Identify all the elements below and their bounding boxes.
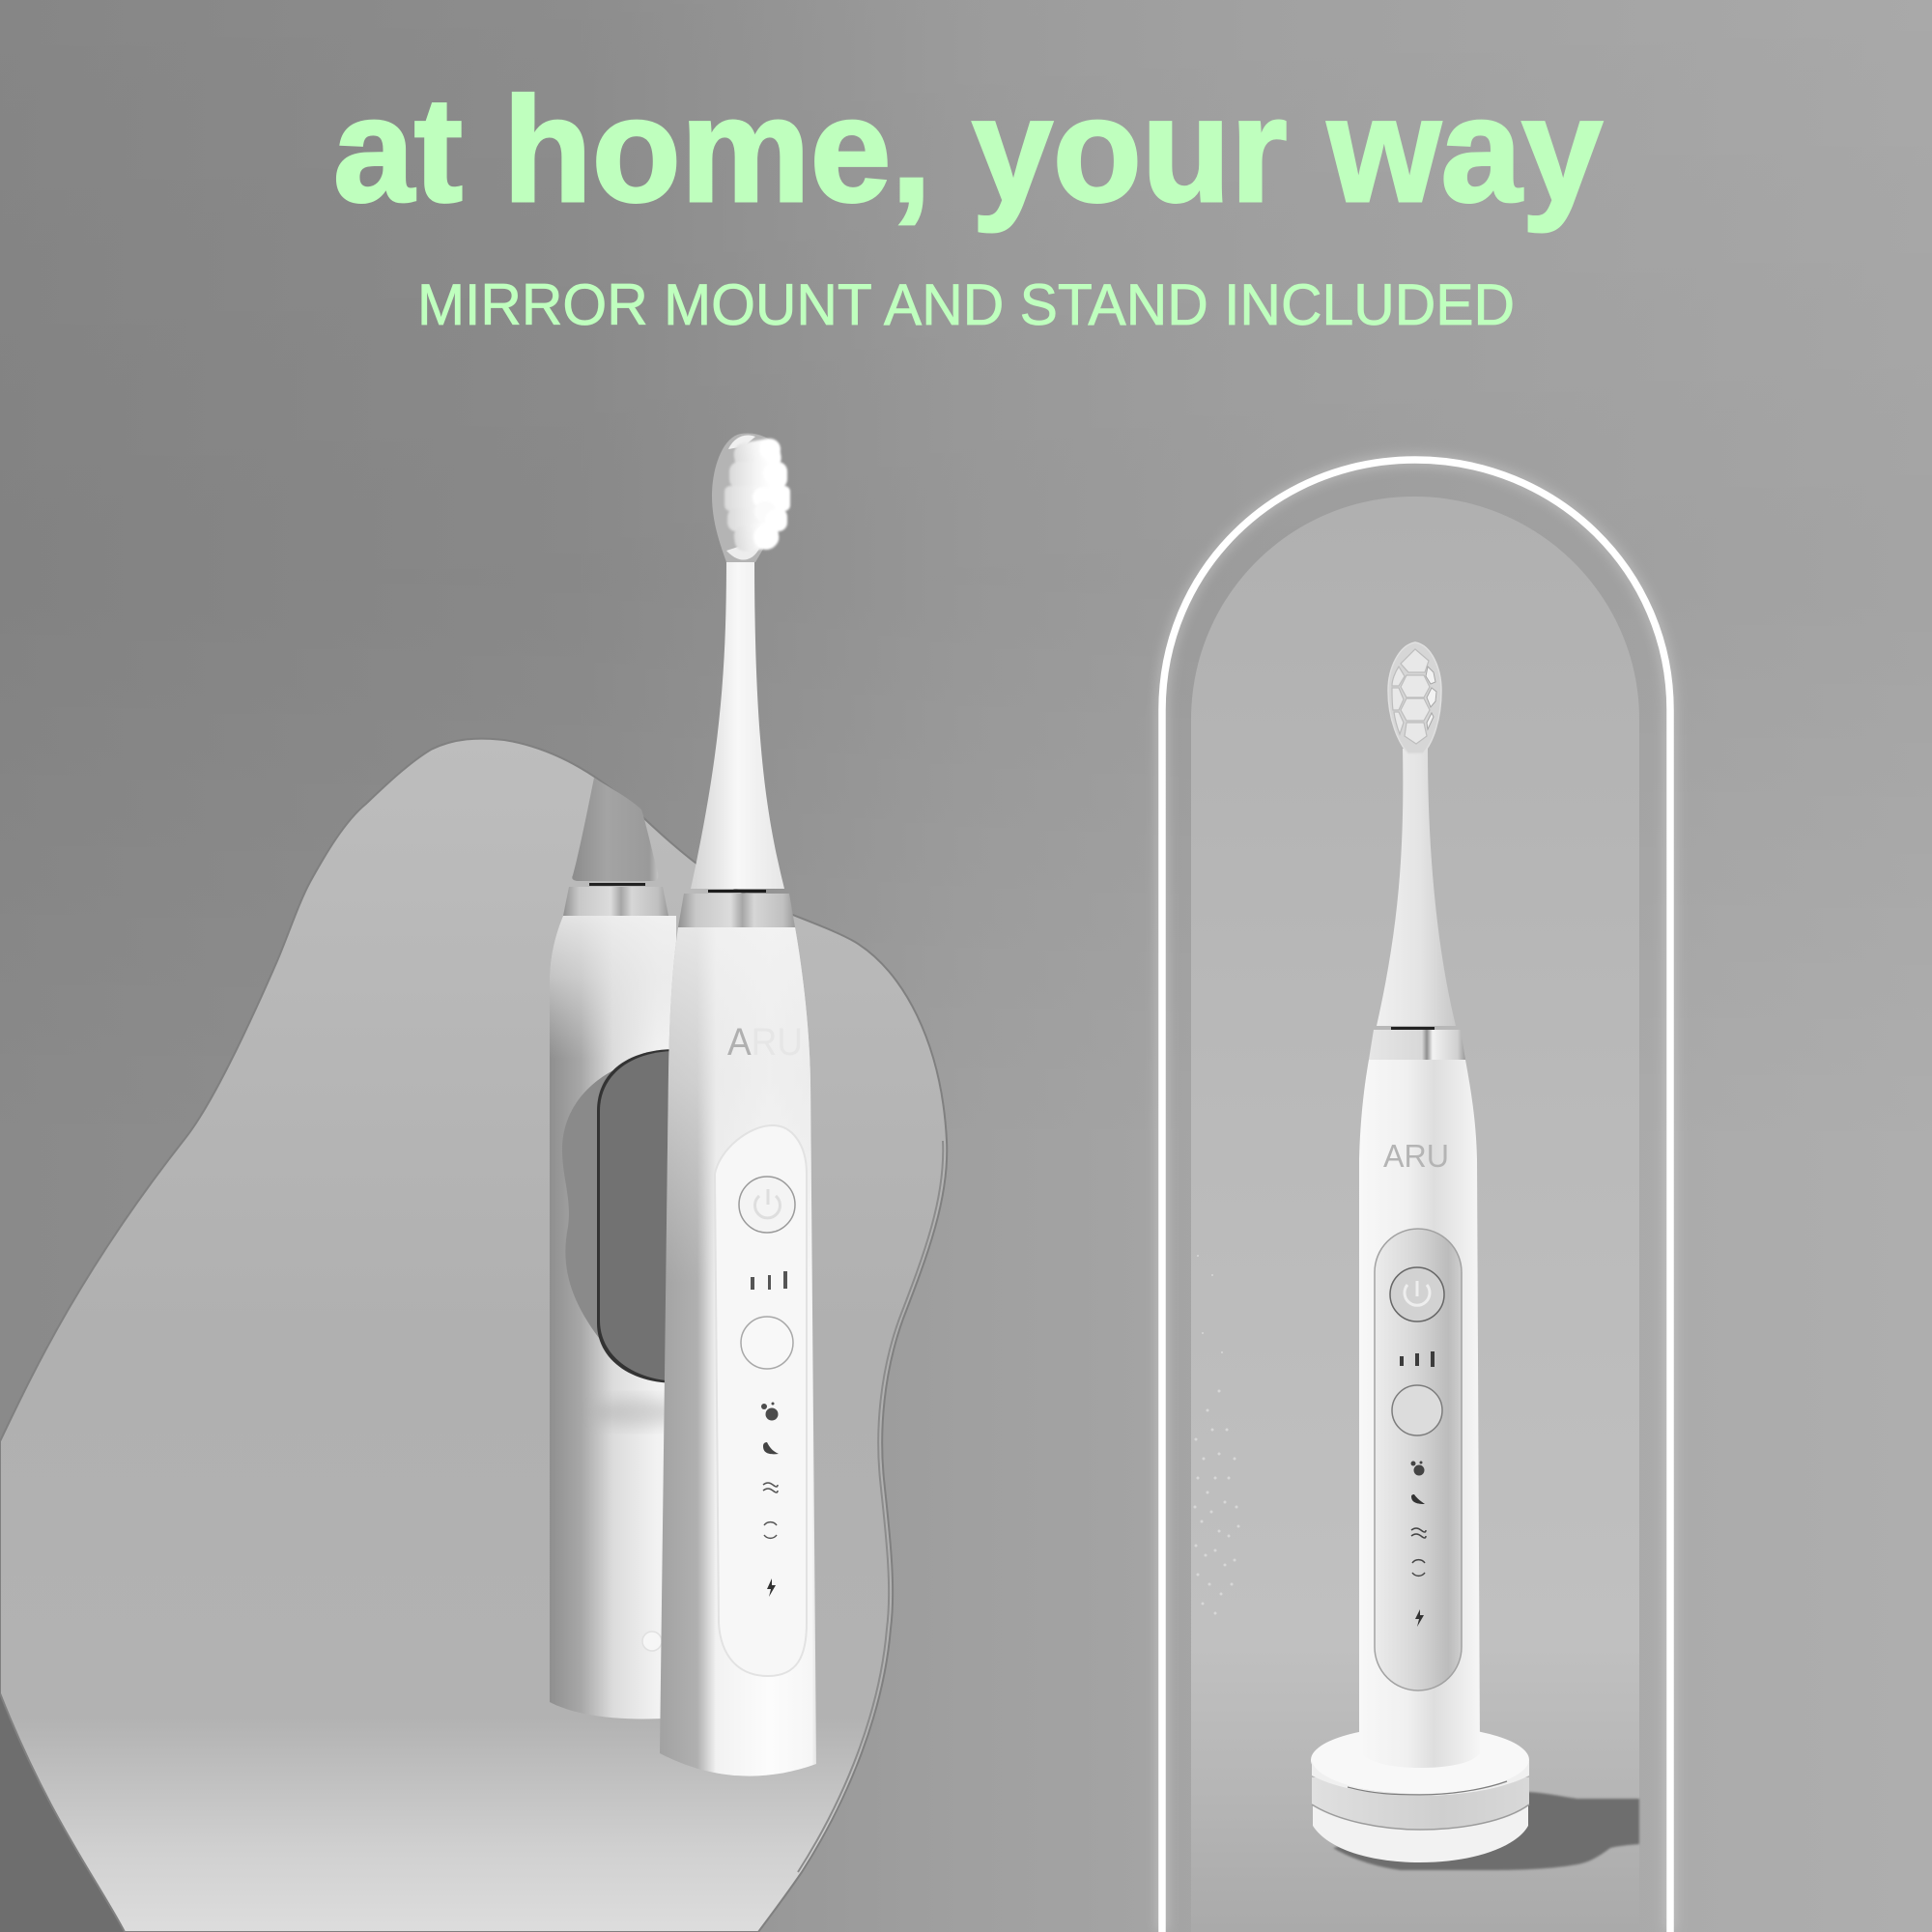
charging stand — [1311, 1726, 1529, 1862]
cast shadow — [1333, 1792, 1639, 1870]
mirror blob — [0, 739, 947, 1932]
icons — [1410, 1461, 1426, 1627]
control panel — [1375, 1229, 1462, 1690]
handle — [660, 927, 816, 1776]
mirror-mounted toothbrush — [660, 434, 816, 1776]
collar — [678, 894, 795, 927]
reflected dark slot — [589, 883, 645, 886]
subtitle: MIRROR MOUNT AND STAND INCLUDED — [417, 272, 1515, 337]
mode button — [1392, 1385, 1442, 1435]
dark slot — [708, 890, 766, 893]
wall mount — [562, 1049, 681, 1426]
glitter specks — [1194, 1255, 1240, 1615]
neck — [1377, 749, 1456, 1026]
reflected collar — [563, 887, 668, 916]
arch frame — [1162, 460, 1670, 1932]
mirror edge double line — [798, 1141, 943, 1872]
power button — [1390, 1267, 1444, 1321]
glow outline — [1162, 460, 1670, 1932]
power button — [739, 1177, 795, 1233]
reflected handle — [550, 916, 676, 1719]
level bars — [751, 1271, 787, 1290]
reflected brush tip — [572, 778, 658, 881]
level bars — [1400, 1351, 1435, 1367]
handle upper highlight — [660, 927, 816, 1776]
mirror with mounted toothbrush reflection — [0, 739, 947, 1932]
ARU logo: ARU — [1383, 1138, 1449, 1174]
white outline — [1162, 460, 1670, 1932]
standing toothbrush — [1311, 642, 1529, 1862]
inner arch panel — [1191, 497, 1639, 1932]
icons — [761, 1403, 779, 1597]
collar — [1369, 1030, 1465, 1060]
handle — [1359, 1060, 1480, 1768]
neck — [691, 554, 784, 889]
brush head — [1388, 642, 1441, 753]
title: at home, your way — [333, 67, 1603, 233]
mode button — [741, 1317, 793, 1369]
ARU logo: ARU — [727, 1021, 803, 1064]
reflected handle upper highlight — [550, 916, 676, 1256]
reflected small dot — [642, 1632, 662, 1651]
dark slot — [1391, 1027, 1435, 1030]
brush head — [712, 434, 790, 562]
control panel — [715, 1125, 807, 1676]
